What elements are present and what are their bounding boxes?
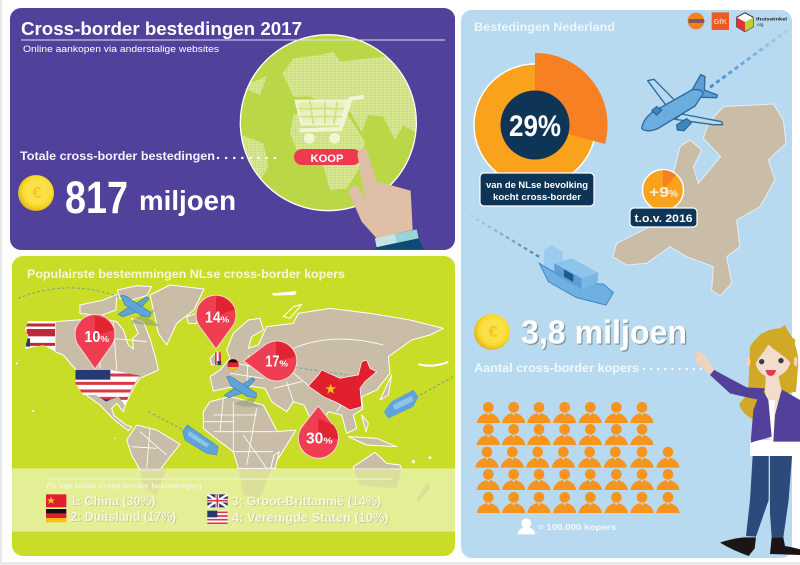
panel: spending Netherlands [461,10,792,558]
value: 817 miljoen: 817 [65,172,128,223]
pin: 30% [298,406,338,458]
logo: gfk: GfK [714,17,728,26]
logo: thuiswinkel: .org [756,22,764,27]
uk flag marker [215,352,221,365]
pin: 30%: % [323,436,333,446]
callout: t.o.v. 2016 [630,208,697,227]
heading: Bestedingen Nederland [474,22,615,34]
subtitle: Online aankopen via anderstalige websites [23,44,220,54]
china [308,360,377,410]
alaska flag [25,321,55,352]
australia [353,452,402,469]
donut chart: 29% [474,53,608,186]
pin: 17%: % [279,359,288,369]
label: number of buyers: Aantal cross-border kopers [474,363,639,375]
jacket [751,388,772,443]
flag: germany [46,509,66,522]
legs [746,456,769,537]
dotted leader [644,368,707,370]
icon: euro coin [474,314,510,350]
sea routes [18,288,453,430]
badge: +9%: +9 [649,184,669,201]
madagascar [271,452,279,468]
plane: arctic [118,295,151,317]
germany flag marker [227,359,239,370]
callout: population share: kocht cross-border [493,192,581,203]
hair back [739,325,798,420]
legend entries: 1: China (30%) [70,494,156,509]
scattered islands [16,291,448,463]
map: netherlands [613,104,786,296]
british isles [210,352,222,365]
pin: 17%: 17 [265,354,280,371]
legend entries: 4: Verenigde Staten (10%) [232,510,389,525]
pin: 30%: 30 [306,431,324,448]
globe with dotted continents [240,35,417,211]
logos [688,12,787,32]
button: koop: KOOP [310,153,344,165]
label: total spending: Totale cross-border bestedingen [20,151,215,163]
icon: euro coin: € [489,324,498,341]
legend entries: 2: Duitsland (17%) [71,509,176,524]
legend entries [70,494,389,525]
icon: pointing hand [348,148,424,249]
panel heading: Populairste bestemmingen NLse cross-border kopers [27,267,345,281]
indonesia [348,437,397,447]
logo: thuiswinkel: thuiswinkel [756,17,787,22]
pin: 10% [75,314,115,369]
badge: +9%: % [669,189,678,200]
africa [203,397,296,468]
philippines [362,415,368,432]
ship with dashed route [470,215,613,305]
ship: atlantic [183,425,218,455]
face [746,357,750,366]
callout: t.o.v. 2016: t.o.v. 2016 [634,213,692,225]
legend: person icon [517,518,535,534]
ship: pacific [384,390,418,418]
north america [55,318,158,431]
value: 817 miljoen [65,172,236,223]
pin: 14%: % [221,314,230,324]
panel: total cross-border spending [10,8,455,250]
south america [127,425,180,470]
legend entries: 3: Groot-Brittannië (14%) [232,494,381,509]
hand [692,348,714,375]
faint borders [55,318,383,468]
logo: thuiswinkel [737,13,787,32]
pin: 14%: 14 [205,309,221,326]
button: koop [294,149,361,165]
arm [710,369,765,400]
callout: population share [480,173,594,206]
plane with dashed route [642,28,790,131]
shoes [720,537,756,556]
arctic islands [80,294,117,316]
title: Cross-border bestedingen 2017 [21,19,302,39]
pin: 10%: % [100,334,109,344]
plane: europe [224,376,257,398]
donut chart: 29%: 29% [509,110,561,143]
legend text: = 100.000 kopers [538,522,616,532]
usa flag [75,370,140,405]
flag: china [46,494,66,507]
flag: uk [207,494,228,507]
pin: 17% [244,341,297,381]
icon: shopping cart [296,97,364,144]
iceland [187,313,197,323]
legend band [12,468,455,532]
pictogram: buyers grid [475,402,680,513]
eurasia [210,308,443,433]
value: 3,8 miljoen: 3,8 miljoen [521,314,687,350]
badge: +9% [642,170,684,210]
legend note: (% van totale cross-border bestedingen) [47,481,202,490]
illustration: woman pointing [692,325,800,556]
icon: euro coin [18,175,54,211]
icon: euro coin: € [33,185,42,202]
japan [380,375,392,400]
callout: population share: van de NLse bevolking [486,180,588,191]
panel: popular destinations [12,256,455,556]
white shirt [750,440,793,456]
world map [16,285,453,470]
flag: usa [207,511,228,525]
logo: postnl [688,13,704,29]
pin: 14% [196,295,236,349]
dotted leader [218,157,281,159]
plane shadows [132,308,262,407]
greenland [150,285,204,345]
value: 817 miljoen: miljoen [139,185,236,216]
pin: 10%: 10 [84,329,101,346]
